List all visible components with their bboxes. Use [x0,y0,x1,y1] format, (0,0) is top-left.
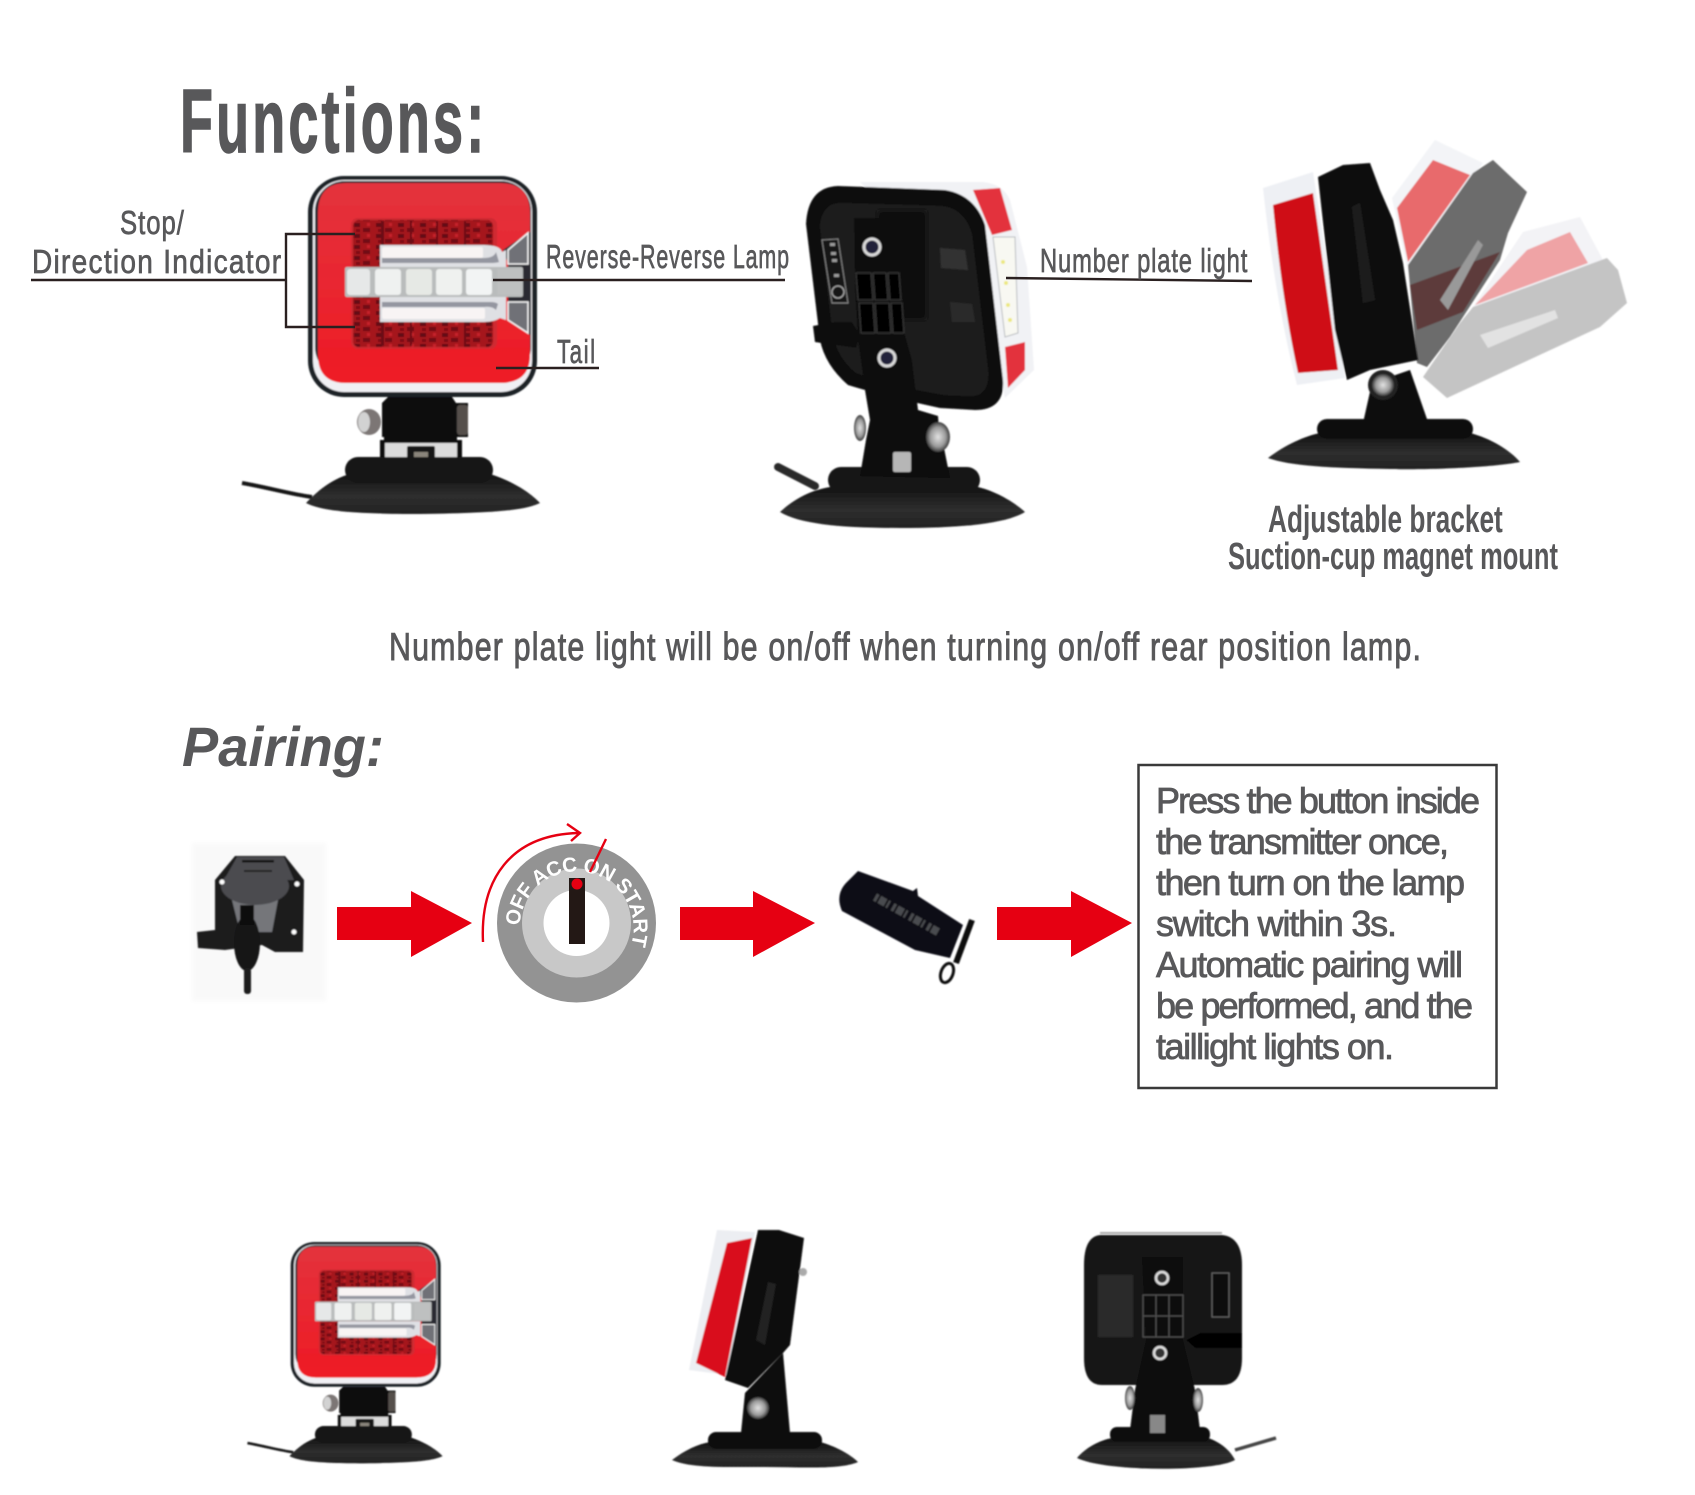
callout line: tail [496,367,599,369]
label: Suction-cup magnet mount: Suction-cup magnet mount [1228,536,1558,578]
label: Adjustable bracket: Adjustable bracket [1268,499,1503,541]
product photo: small lamp side view [672,1230,858,1468]
label: key positions: OFF ACC ON START [506,858,648,948]
arrow: step three to box [997,891,1132,957]
product photo: small lamp front view [247,1242,443,1463]
panel: pairing steps [196,764,1498,1090]
callout box: pairing instructions: Automatic pairing will [1156,944,1463,985]
callout box: pairing instructions [1138,765,1496,1088]
panel: rear view lamp with number plate light [778,182,1252,528]
product photo: tilted lamp ghost far [1423,217,1627,398]
icon: transmitter plug [839,871,972,984]
callout box: pairing instructions: taillight lights on. [1156,1026,1394,1067]
product photo: tilted lamp ghost middle [1392,140,1527,367]
callout box: pairing instructions: then turn on the lamp [1156,862,1465,903]
callout line: number plate light [1006,278,1252,281]
callout line: reverse lamp [493,279,785,281]
panel: adjustable bracket lamp side view [1228,140,1627,578]
product photo: small lamp rear view [1077,1233,1276,1469]
callout box: pairing instructions: switch within 3s. [1156,903,1397,944]
product photo: lamp front view [242,176,540,514]
callout box: pairing instructions: be performed, and the [1156,985,1473,1026]
callout box: pairing instructions: the transmitter once, [1156,821,1449,862]
title: Functions: Functions: [180,71,484,171]
panel: front view lamp with callouts [31,176,789,514]
arrow: step two to three [680,891,815,957]
heading: Pairing: Pairing: [182,715,384,778]
callout box: pairing instructions: Press the button inside [1156,780,1480,821]
label: Stop/: Stop/ [120,205,185,242]
label: Direction Indicator: Direction Indicator [32,244,281,281]
icon: trailer socket [192,843,326,1001]
arrow: key rotation [483,824,580,942]
bracket line: stop and direction indicator [31,234,355,327]
note: number plate light behaviour: Number plate light will be on/off when turning on/off rear position lamp. [389,625,1421,669]
product photo: lamp rear view [778,182,1034,528]
product photo: tilted lamp main [1263,163,1520,469]
label: Reverse-Reverse Lamp: Reverse-Reverse Lamp [546,238,789,275]
icon: ignition key switch [482,823,656,1002]
label: Number plate light: Number plate light [1040,243,1247,280]
label: Tail: Tail [557,333,595,370]
arrow: step one to two [337,891,472,957]
